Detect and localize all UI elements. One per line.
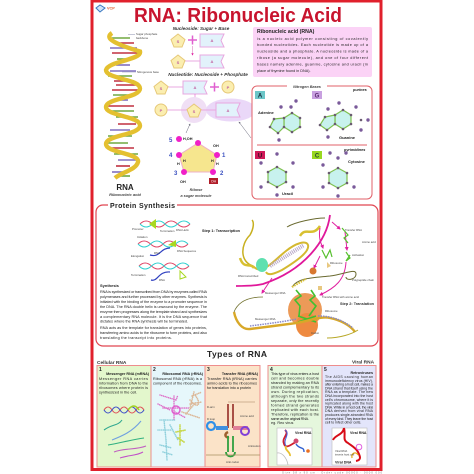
panel: messenger RNA: synthesized in the cell. [99,390,137,394]
panel: protein synthesis [96,201,378,346]
tRNA cloverleaf drawing: Amino acid [240,414,254,418]
synthesis text [100,283,208,340]
translation labels [238,228,376,335]
ribose sugar molecule: Ribose [190,188,202,192]
panel: retrovirus: of every kind. They leave the host [325,417,373,421]
messenger RNA strand [234,312,355,332]
base: uracil [255,151,295,197]
helix labels: Sugar phosphate [136,32,158,36]
nucleoside row 2 [171,55,224,68]
inset: retrovirus replication: inserts host cell [335,452,355,456]
panel: viral RNA double stranded: formed strand generates [271,404,319,408]
panel: retrovirus: DNA derived from viral RNA [325,409,374,413]
nucleoside row 2: A [211,59,214,64]
panel: ribonucleic acid description: bases namely adenine, guanine, cytosine and uracil (in [257,62,368,66]
panel: viral RNA double stranded [268,366,322,467]
transcription initiation diagram: DNA Helix [176,228,189,232]
transcription termination diagram [131,263,189,282]
translation labels: RNA transcribed [238,274,259,278]
synthesis text: a complementary RNA molecule. It is the DNA sequence that [100,315,208,319]
panel: retrovirus: cell to infect other cells. [325,421,361,425]
panel: viral RNA double stranded: stranded by making an RNA [271,381,319,385]
types of RNA heading: Types of RNA [207,349,267,359]
title: RNA: Ribonucleic Acid [134,5,342,27]
translation labels: Amino acid [362,240,376,244]
panel: transfer RNA: Transfer RNA (tRNA) [222,372,259,376]
translation labels: Step 2: Translation [340,302,375,306]
base: cytosine: C [315,154,320,160]
nucleoside row 1: S [177,39,180,44]
transcription elongation diagram: Elongation [131,254,145,258]
panel: retrovirus: replicated along with the host [325,402,373,406]
synthesis text: polymerases and further processed by other enzymes. Synthesis is [100,295,207,299]
transcription elongation diagram [131,240,197,258]
panel: viral RNA double stranded: replicated with each host. [271,408,319,412]
synthesis text: RNA acts as the template for translation of genes into proteins, [100,326,207,330]
ribose sugar molecule [169,136,226,198]
transcription elongation diagram: RNA [154,251,160,255]
panel: nitrogen bases: Nitrogen Bases [293,85,321,89]
transcription elongation diagram: DNA Sequence [177,249,197,253]
nucleotide row 1 [154,81,234,94]
logo: VCP [107,6,115,10]
inset: retrovirus replication: Viral RNA [335,449,347,453]
DNA transcription bubble [240,218,325,274]
RNA label: RNA [116,183,134,192]
cellular RNA label: Cellular RNA [97,360,127,366]
ribose sugar molecule: a sugar molecule [180,194,212,198]
translation labels: Transfer RNA with amino acid [322,295,359,299]
movement arrows [262,222,347,295]
ribose sugar molecule: H [211,159,214,163]
panel: retrovirus [322,366,376,467]
translation labels: Transfer RNA [345,228,362,232]
panel: ribonucleic acid description: ribose (a sugar molecule), and one of four different [257,56,369,60]
helix labels: backbone [136,36,149,40]
panel: transfer RNA: amino acids to the ribosomes [207,382,257,386]
nucleotide row 1: A [194,85,197,90]
panel: viral RNA double stranded: cell and becomes double [271,376,319,380]
panel: viral RNA double stranded: although the two strands [271,394,319,398]
panel: ribonucleic acid description: is a nucleic acid polymer consisting of covalently [257,37,368,41]
tRNA cloverleaf drawing: D-arm [207,405,215,409]
ribosome bound tRNA [295,290,316,322]
panel: ribosomal RNA: Ribosomal RNA (rRNA) [162,372,204,376]
panel: retrovirus: cell's chromosome, where it is [325,398,373,402]
nucleoside and nucleotide diagrams [154,26,256,138]
base: adenine: Adenine [258,110,275,115]
ribose sugar molecule: OH [180,180,186,184]
synthesis text: enzyme then progresses along the template strand and synthesizes [100,310,207,314]
panel: retrovirus: produces single-stranded RNA [325,413,374,417]
translation labels: Codon [311,331,320,335]
rRNA structure drawing [158,392,202,460]
protein synthesis heading: Protein Synthesis [110,203,175,210]
panel: viral RNA double stranded: eg. Reo virus [271,421,293,425]
panel: ribosomal RNA: component of the ribosomes. [153,382,202,386]
nucleoside and nucleotide diagrams: Nucleoside: Sugar + Base [173,26,230,31]
panel: retrovirus: DNA incorporated into the host [325,394,373,398]
logo [96,5,115,12]
translation labels: Ribosome [330,261,343,265]
ribose sugar molecule: 1 [222,153,226,159]
panel: viral RNA double stranded: same as the original RNA. [271,417,309,421]
tRNA cloverleaf drawing: D loop [207,417,216,421]
panel: nitrogen bases: purines [352,88,367,92]
nucleoside row 1 [171,34,224,55]
tRNA cloverleaf drawing [206,402,261,464]
base: guanine: G [315,94,320,100]
transcription initiation diagram [132,219,190,239]
synthesis text: translating the transcript into proteins. [100,336,172,340]
panel: ribonucleic acid description: Ribonucleic acid (RNA) [257,29,315,35]
ribose sugar molecule: 5 [169,138,173,144]
panel: retrovirus: The AIDS causing human [325,375,373,379]
translation labels: Messenger RNA [255,317,276,321]
translation labels: Polypeptide chain [352,278,375,282]
panel: ribosomal RNA: 2 [153,367,156,373]
panel: retrovirus: Retroviruses [350,371,373,375]
panel: messenger RNA: information from DNA to the [99,382,148,386]
mRNA wave drawing [104,406,146,458]
panel: messenger RNA: Messenger RNA (mRNA) [106,372,150,376]
panel: transfer RNA [205,366,261,467]
synthesis text: RNA is synthesized or transcribed from DNA by enzymes called RNA [100,290,207,294]
panel: ribonucleic acid description: bonded nucleotides. Each nucleotide is made up of a [257,43,369,47]
panel: transfer RNA: 3 [207,367,210,373]
base: uracil: Uracil [282,191,293,196]
base: cytosine [312,151,366,198]
translation labels: Ribosome [325,309,338,313]
panel: nitrogen bases: pyrimidines [343,148,365,152]
ribose sugar molecule: 3 [174,171,178,177]
transcription termination diagram: RNA [159,278,165,282]
base: adenine [255,91,301,142]
base: cytosine: Cytosine [348,159,366,164]
ribose sugar molecule: 2 [220,171,224,177]
translation labels: Messenger RNA [265,291,286,295]
nucleotide row 2: S [193,109,196,114]
ribose sugar molecule: H,OH [183,137,193,141]
ribose sugar molecule: H [177,162,180,166]
nucleotide row 2 [155,97,256,123]
helix labels: Nitrogenous base [137,70,159,74]
ribose sugar molecule: 4 [169,153,173,159]
panel: transfer RNA: for translation into a protein [207,386,251,390]
tRNA cloverleaf drawing: Anti codon [226,460,240,464]
panel: ribosomal RNA: Ribosomal RNA (rRNA) is a [153,377,203,381]
panel: ribonucleic acid description: place of thymine found in DNA). [257,69,311,73]
translation illustration [234,215,376,338]
panel: protein synthesis: Step 1: Transcription [202,229,241,233]
RNA label [109,183,141,197]
nucleotide row 1: P [227,85,230,90]
nucleotide row 2: A [227,108,230,113]
panel: ribonucleic acid description [253,27,372,77]
poster border [92,1,381,470]
inset: retrovirus replication: Viral RNA [350,431,367,435]
RNA label: Ribonucleic acid [109,192,141,197]
helix labels [122,32,159,74]
panel: viral RNA double stranded: This type of virus enters a host [271,372,320,376]
ribose sugar molecule: OH [211,180,217,184]
panel: messenger RNA: ribosomes where protein is [99,386,148,390]
nucleoside row 2: S [177,60,180,65]
helix ribbon [106,33,140,178]
nucleotide row 1: S [160,86,163,91]
panel: messenger RNA: 1 [99,367,102,373]
panel: viral RNA double stranded: own. During replication, [271,390,319,394]
synthesis text: Synthesis [100,283,120,288]
polypeptide chain [292,271,356,287]
ribose sugar molecule: H [216,162,219,166]
panel: retrovirus: immunodeficiency virus (HIV), [325,379,373,383]
nucleoside row 1: A [211,38,214,43]
panel: retrovirus: 5 [324,367,327,373]
panel: viral RNA double stranded: 4 [270,367,273,373]
base: guanine: Guanine [339,135,356,140]
base: adenine: A [258,94,263,100]
panel: messenger RNA [97,366,151,467]
base: uracil: U [258,154,262,160]
synthesis text: the DNA. The RNA double helix is unwound by the enzyme. The [100,305,207,309]
transcription initiation diagram: Termination [160,229,175,233]
ribose sugar molecule: H [183,159,186,163]
nucleotide row 2: P [160,108,163,113]
panel: retrovirus: DNA strand that itself using the [325,386,373,390]
panel: viral RNA double stranded: strand complementary to its [271,386,319,390]
base: guanine [312,91,370,140]
nucleoside and nucleotide diagrams: Nucleotide: Nucleoside + Phosphate [168,72,248,77]
panel: ribosomal RNA [151,366,205,467]
inset: retrovirus replication [332,428,367,465]
transcription initiation diagram: Initiation [137,235,148,239]
inset: viral RNA replication: Viral RNA [295,431,312,435]
inset: retrovirus replication: Viral DNA [335,460,352,464]
transcription termination diagram: Termination [131,273,146,277]
tRNA cloverleaf drawing: Anticodon [248,444,261,448]
synthesis text: transferring amino acids to the ribosome to form proteins, and also [100,331,207,335]
panel: transfer RNA: Transfer RNA (tRNA) carries [207,377,257,381]
RNA double helix [106,33,140,178]
ribose sugar molecule: OH [213,144,219,148]
panel: ribonucleic acid description: nucleoside and a phosphate. A nucleoside is made of a [257,50,369,54]
synthesis text: dictates where the RNA synthesis will be terminated. [100,320,188,324]
translation labels: Activation [352,253,365,257]
nuclear membrane [236,215,330,286]
ribosome [288,293,322,327]
panel: viral RNA double stranded: separate, only the recently [271,399,319,403]
panel: nitrogen bases [252,83,372,199]
transcription initiation diagram: Promoter [132,227,144,231]
helix base pairs [108,38,140,176]
transfer RNA molecules [322,228,350,261]
panel: viral RNA double stranded: Therefore, replication is the [271,412,319,416]
synthesis text: initiated with the binding of the enzyme to a promoter sequence in [100,300,207,304]
panel: messenger RNA: Messenger RNA carries [99,377,148,381]
panel: retrovirus: RNA as a template. The new [325,390,373,394]
panel: retrovirus: after entering a host cell, makes a [325,383,373,387]
panel: retrovirus: DNA. While in a host cell, the viral [325,405,373,409]
viral RNA label: Viral RNA [352,360,375,366]
